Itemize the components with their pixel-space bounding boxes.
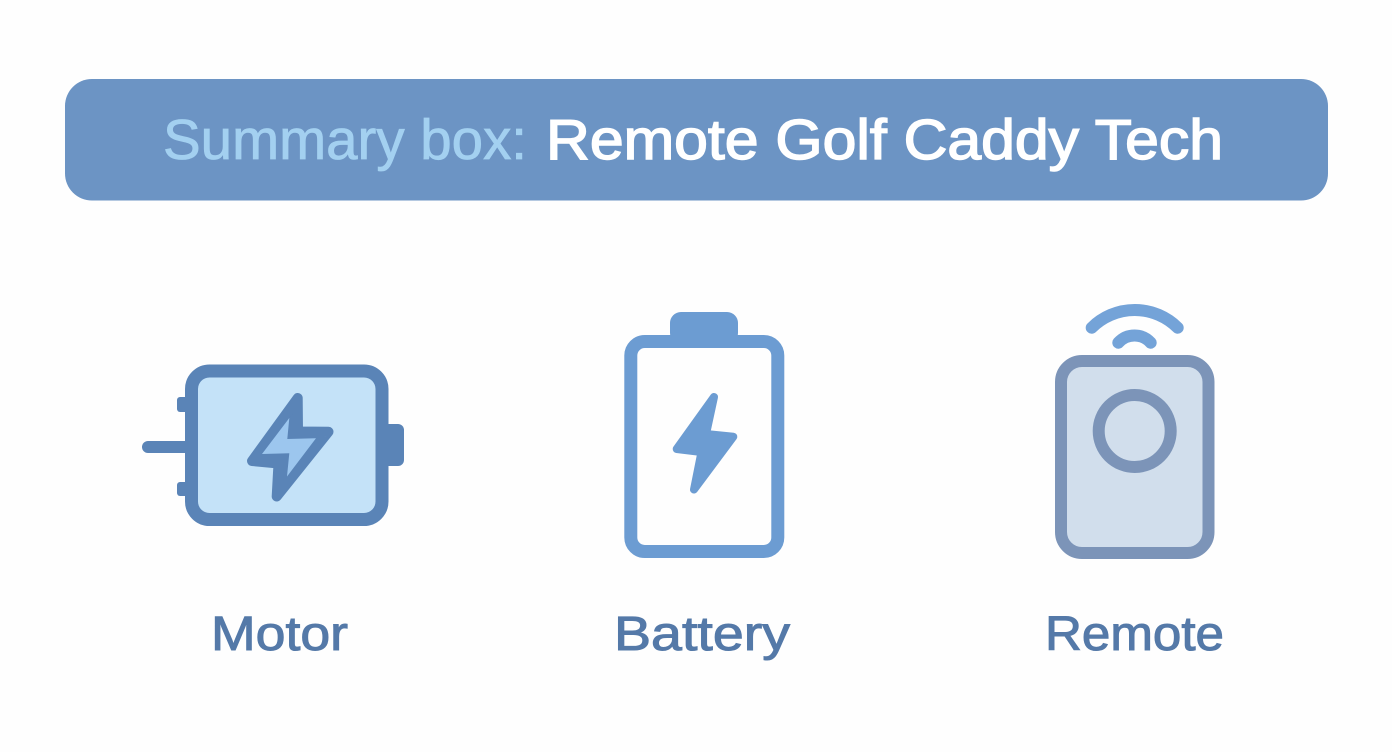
label: motor: Motor bbox=[211, 608, 348, 661]
header banner bbox=[65, 79, 1328, 200]
title: Summary box: bbox=[163, 108, 527, 172]
icon: remote bbox=[1061, 310, 1208, 553]
icon: motor bbox=[142, 371, 404, 520]
title: Remote Golf Caddy Tech bbox=[546, 108, 1223, 172]
label: battery: Battery bbox=[614, 608, 790, 661]
icon: battery bbox=[631, 312, 778, 552]
title bbox=[163, 108, 1223, 172]
label: remote: Remote bbox=[1045, 608, 1224, 661]
